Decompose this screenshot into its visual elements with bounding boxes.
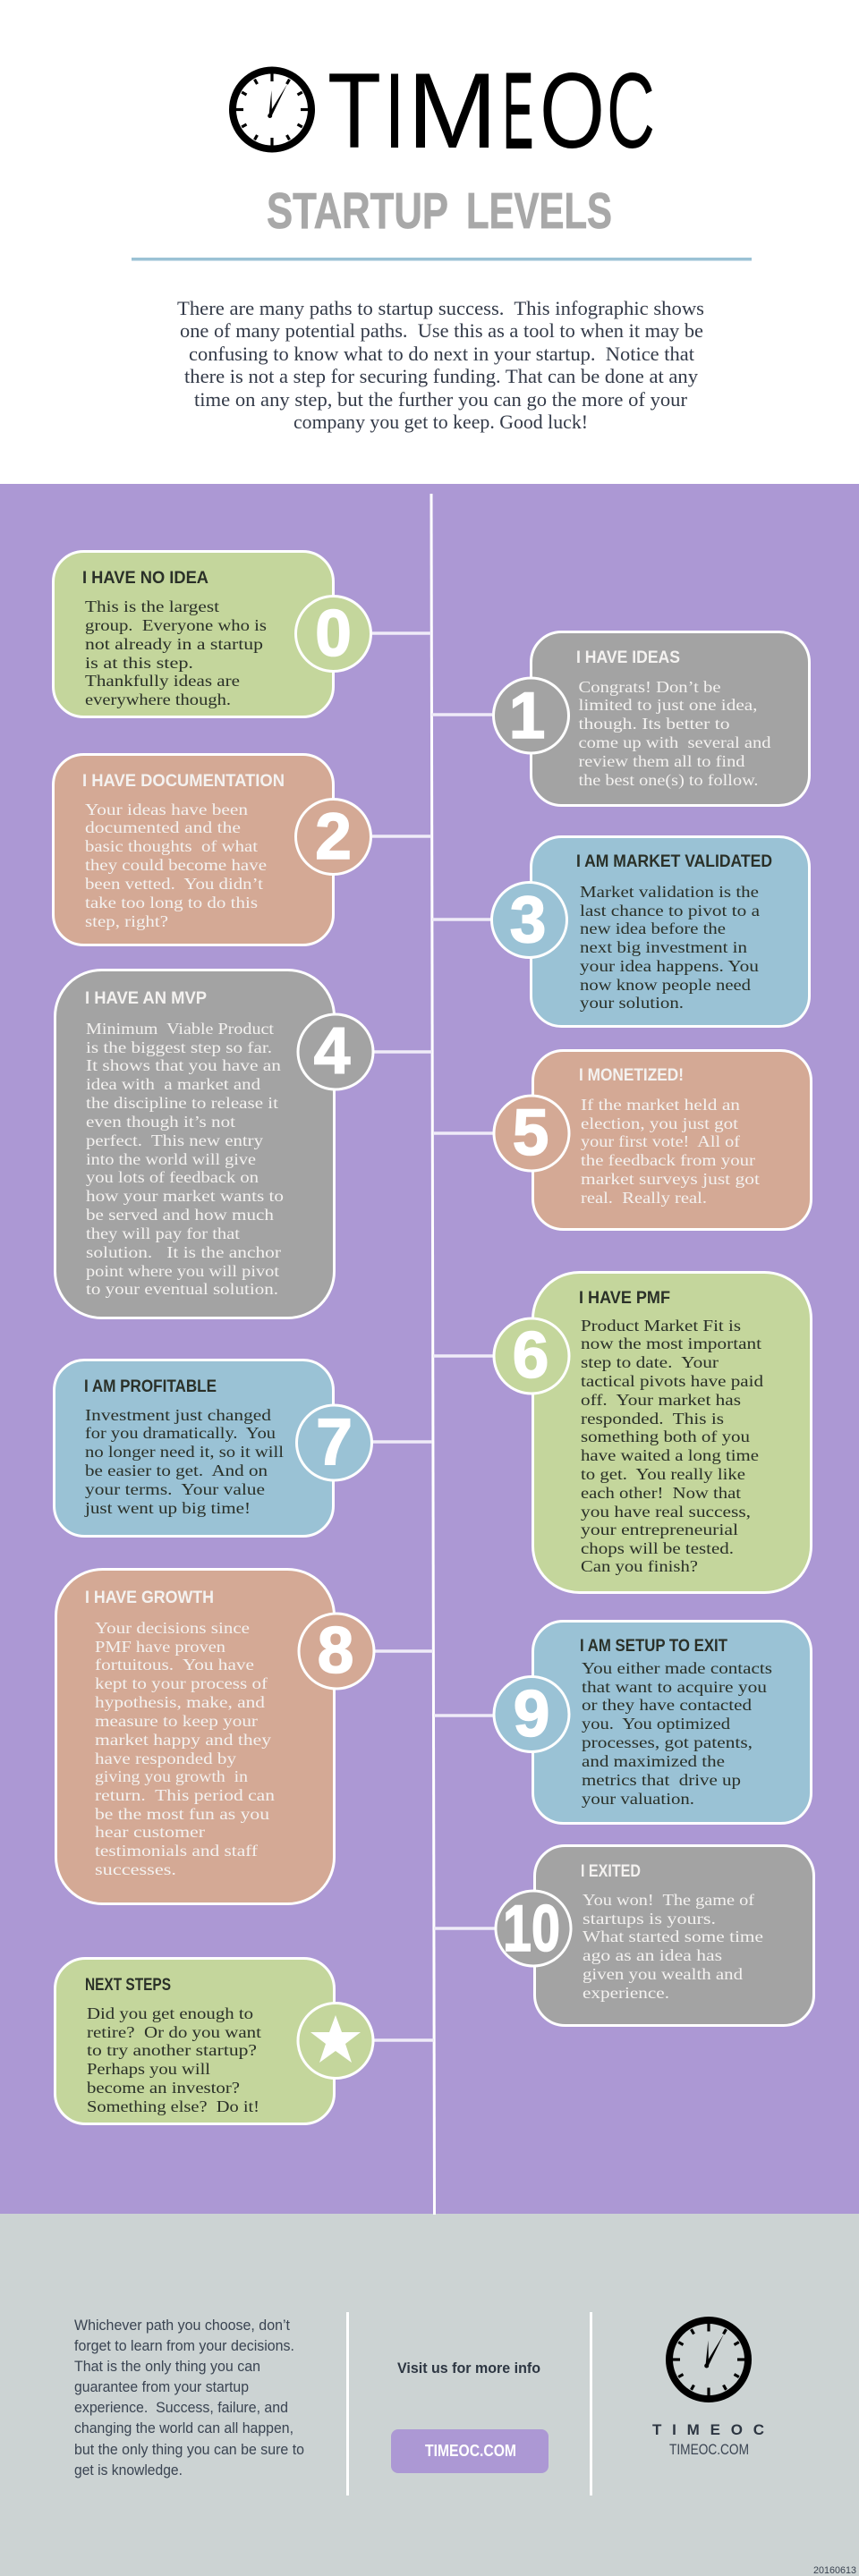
body text: market happy and they bbox=[95, 1731, 271, 1749]
body text: even though it’s not bbox=[86, 1113, 235, 1131]
intro text: There are many paths to startup success. This infographic shows bbox=[177, 297, 704, 319]
footer brand name: T I M E O C bbox=[652, 2421, 764, 2438]
body text: your terms. Your value bbox=[85, 1480, 265, 1498]
body text bbox=[581, 1317, 763, 1575]
body text bbox=[86, 1020, 284, 1298]
body text: review them all to find bbox=[578, 752, 745, 770]
card background bbox=[532, 837, 809, 1027]
number badge bbox=[298, 1014, 373, 1089]
footer website: TIMEOC.COM bbox=[669, 2441, 749, 2458]
body text: responded. This is bbox=[581, 1410, 724, 1428]
body text bbox=[85, 597, 267, 708]
body text bbox=[84, 1406, 284, 1517]
body text: chops will be tested. bbox=[581, 1539, 734, 1557]
body text bbox=[580, 883, 760, 1012]
number badge: 8 bbox=[318, 1614, 353, 1687]
body text bbox=[95, 1619, 275, 1878]
body text: your solution. bbox=[580, 994, 684, 1012]
logo wordmark bbox=[327, 51, 655, 171]
body text: Your ideas have been bbox=[85, 801, 248, 818]
connector bbox=[433, 1131, 493, 1135]
body text: new idea before the bbox=[580, 919, 726, 937]
body text: given you wealth and bbox=[583, 1965, 743, 1983]
body text: they could become have bbox=[85, 856, 267, 874]
body text: point where you will pivot bbox=[86, 1262, 279, 1280]
body text: your entrepreneurial bbox=[581, 1521, 738, 1538]
body text: take too long to do this bbox=[85, 894, 258, 911]
intro text bbox=[177, 297, 704, 433]
body text: limited to just one idea, bbox=[578, 696, 757, 714]
body text: have waited a long time bbox=[581, 1446, 759, 1464]
body text: everywhere though. bbox=[85, 691, 231, 708]
logo wordmark: O bbox=[540, 51, 605, 171]
number badge: 1 bbox=[509, 680, 545, 752]
body text: Minimum Viable Product bbox=[86, 1020, 274, 1038]
logo wordmark: I bbox=[384, 51, 405, 171]
purple timeline background bbox=[0, 484, 859, 2214]
footer divider left bbox=[346, 2312, 349, 2496]
title bbox=[267, 182, 612, 240]
heading: I HAVE GROWTH bbox=[85, 1588, 214, 1607]
body text: how your market wants to bbox=[86, 1187, 284, 1205]
body text: retire? Or do you want bbox=[87, 2023, 261, 2041]
body text: be easier to get. And on bbox=[85, 1462, 268, 1479]
icon: clock logo bbox=[233, 70, 311, 148]
body text: ago as an idea has bbox=[583, 1946, 722, 1964]
number badge bbox=[494, 1318, 569, 1394]
body text: to try another startup? bbox=[87, 2041, 257, 2059]
body text: something both of you bbox=[581, 1428, 750, 1445]
card background bbox=[532, 631, 809, 805]
number badge bbox=[494, 1676, 569, 1751]
logo wordmark: E bbox=[503, 51, 533, 171]
panel: level 10 bbox=[434, 1846, 814, 2025]
panel: level 6 bbox=[433, 1272, 811, 1592]
body text: and maximized the bbox=[582, 1752, 725, 1770]
footer text: That is the only thing you can bbox=[74, 2359, 260, 2375]
body text: be the most fun as you bbox=[95, 1805, 269, 1823]
version stamp: 20160613 bbox=[813, 2565, 856, 2576]
body text: election, you just got bbox=[581, 1114, 738, 1132]
heading: I HAVE AN MVP bbox=[85, 988, 207, 1008]
body text: Did you get enough to bbox=[87, 2004, 253, 2022]
footer text: forget to learn from your decisions. bbox=[74, 2338, 294, 2354]
heading: I HAVE NO IDEA bbox=[82, 568, 208, 588]
body text: become an investor? bbox=[87, 2079, 240, 2097]
body text: now the most important bbox=[581, 1335, 761, 1352]
heading: I HAVE DOCUMENTATION bbox=[82, 771, 285, 791]
body text: perfect. This new entry bbox=[86, 1131, 263, 1149]
card background bbox=[54, 551, 333, 717]
footer text: guarantee from your startup bbox=[74, 2379, 249, 2395]
body text: or they have contacted bbox=[582, 1696, 752, 1714]
connector bbox=[434, 1927, 495, 1930]
body text: have responded by bbox=[95, 1750, 236, 1767]
body text: now know people need bbox=[580, 976, 751, 994]
body text: What started some time bbox=[583, 1928, 763, 1945]
connector bbox=[374, 1050, 432, 1054]
body text: Investment just changed bbox=[85, 1406, 271, 1424]
body text: to get. You really like bbox=[581, 1465, 745, 1483]
body text: off. Your market has bbox=[581, 1391, 741, 1409]
body text: Can you finish? bbox=[581, 1557, 698, 1575]
footer text: Whichever path you choose, don’t bbox=[74, 2318, 290, 2334]
body text: hear customer bbox=[95, 1823, 205, 1841]
card background bbox=[55, 970, 335, 1318]
body text: last chance to pivot to a bbox=[580, 902, 760, 919]
connector bbox=[374, 1649, 433, 1653]
body text: real. Really real. bbox=[581, 1189, 707, 1207]
panel: level 7 bbox=[54, 1360, 432, 1537]
body text: group. Everyone who is bbox=[85, 616, 267, 634]
heading: I MONETIZED! bbox=[579, 1065, 684, 1085]
intro text: company you get to keep. Good luck! bbox=[293, 411, 588, 433]
heading: I AM PROFITABLE bbox=[84, 1377, 217, 1396]
number badge: 9 bbox=[514, 1678, 549, 1750]
number badge bbox=[297, 1405, 372, 1480]
body text: solution. It is the anchor bbox=[86, 1243, 281, 1261]
number badge bbox=[299, 1614, 374, 1689]
footer divider right bbox=[590, 2312, 592, 2496]
footer text bbox=[74, 2318, 304, 2479]
body text: you. You optimized bbox=[582, 1715, 730, 1733]
panel: level 3 bbox=[432, 837, 809, 1027]
body text: Something else? Do it! bbox=[87, 2097, 259, 2115]
title: LEVELS bbox=[466, 182, 612, 240]
body text: experience. bbox=[583, 1984, 669, 2002]
logo wordmark: T bbox=[327, 51, 381, 171]
body text: successes. bbox=[95, 1860, 176, 1878]
panel: level 2 bbox=[54, 755, 431, 945]
body text: metrics that drive up bbox=[582, 1771, 741, 1789]
button: website: TIMEOC.COM bbox=[425, 2442, 516, 2460]
number badge: 3 bbox=[510, 884, 546, 956]
footer text: experience. Success, failure, and bbox=[74, 2400, 288, 2416]
card background bbox=[55, 1959, 335, 2123]
heading: NEXT STEPS bbox=[85, 1975, 171, 1995]
card background bbox=[54, 755, 333, 945]
body text: no longer need it, so it will bbox=[85, 1443, 284, 1461]
body text: the feedback from your bbox=[581, 1151, 755, 1169]
heading: I EXITED bbox=[581, 1861, 641, 1881]
intro text: one of many potential paths. Use this as a tool to when it may be bbox=[180, 319, 703, 342]
number badge: 5 bbox=[513, 1097, 549, 1169]
number badge: 6 bbox=[513, 1319, 549, 1392]
card background bbox=[54, 1360, 333, 1537]
body text: your first vote! All of bbox=[581, 1132, 740, 1150]
body text: they will pay for that bbox=[86, 1224, 240, 1242]
body text: for you dramatically. You bbox=[85, 1424, 276, 1442]
body text: This is the largest bbox=[85, 597, 219, 615]
panel: level 5 bbox=[433, 1050, 811, 1229]
icon: footer clock bbox=[669, 2320, 748, 2399]
title: STARTUP bbox=[267, 182, 448, 240]
body text: not already in a startup bbox=[85, 635, 263, 653]
body text: Market validation is the bbox=[580, 883, 759, 901]
body text: It shows that you have an bbox=[86, 1056, 281, 1074]
connector bbox=[433, 1354, 493, 1358]
body text: If the market held an bbox=[581, 1096, 740, 1114]
body text bbox=[85, 801, 267, 930]
body text: return. This period can bbox=[95, 1786, 275, 1804]
body text: each other! Now that bbox=[581, 1484, 741, 1502]
body text: You won! The game of bbox=[583, 1891, 754, 1909]
body text: the best one(s) to follow. bbox=[578, 771, 759, 789]
panel: level 0 bbox=[54, 551, 431, 717]
number badge bbox=[295, 596, 370, 671]
body text: though. Its better to bbox=[578, 715, 730, 733]
intro text: there is not a step for securing funding. That can be done at any bbox=[184, 365, 699, 387]
body text bbox=[578, 678, 771, 789]
body text: just went up big time! bbox=[84, 1499, 251, 1517]
body text bbox=[583, 1891, 763, 2002]
number badge: 4 bbox=[314, 1015, 351, 1088]
footer text: changing the world can all happen, bbox=[74, 2420, 293, 2436]
number badge: 0 bbox=[315, 597, 352, 670]
body text: come up with several and bbox=[578, 733, 771, 751]
body text: into the world will give bbox=[86, 1150, 256, 1168]
header divider bbox=[132, 258, 752, 261]
connector bbox=[432, 918, 491, 921]
body text: market surveys just got bbox=[581, 1170, 760, 1188]
body text bbox=[582, 1659, 772, 1808]
footer text: get is knowledge. bbox=[74, 2462, 183, 2479]
body text: you lots of feedback on bbox=[86, 1168, 259, 1186]
body text: step to date. Your bbox=[581, 1353, 719, 1371]
body text bbox=[87, 2004, 261, 2115]
body text: you have real success, bbox=[581, 1503, 751, 1521]
body text: been vetted. You didn’t bbox=[85, 875, 263, 893]
connector bbox=[372, 835, 431, 838]
body text: the discipline to release it bbox=[86, 1094, 278, 1112]
body text: Perhaps you will bbox=[87, 2060, 210, 2078]
icon: star badge bbox=[298, 2004, 373, 2079]
number badge: 7 bbox=[316, 1406, 353, 1479]
timeline spine bbox=[431, 494, 435, 2215]
body text: idea with a market and bbox=[86, 1075, 260, 1093]
body text: startups is yours. bbox=[583, 1910, 716, 1928]
heading: I AM SETUP TO EXIT bbox=[580, 1636, 727, 1656]
body text: measure to keep your bbox=[95, 1712, 258, 1730]
body text: Your decisions since bbox=[95, 1619, 250, 1637]
card background bbox=[55, 1569, 335, 1903]
body text: hypothesis, make, and bbox=[95, 1693, 265, 1711]
body text: to your eventual solution. bbox=[86, 1280, 278, 1298]
body text: your valuation. bbox=[582, 1790, 694, 1808]
heading: I HAVE IDEAS bbox=[576, 648, 680, 667]
connector bbox=[372, 631, 431, 635]
body text: Product Market Fit is bbox=[581, 1317, 741, 1335]
intro text: time on any step, but the further you can go the more of your bbox=[194, 388, 688, 411]
body text: basic thoughts of what bbox=[85, 837, 258, 855]
number badge bbox=[494, 678, 569, 753]
panel: level 9 bbox=[434, 1621, 811, 1823]
card background bbox=[535, 1846, 814, 2025]
number badge: 2 bbox=[315, 801, 352, 873]
panel: level 8 bbox=[55, 1569, 433, 1903]
panel: level 4 bbox=[55, 970, 432, 1318]
body text: step, right? bbox=[85, 912, 168, 930]
connector bbox=[431, 713, 492, 716]
body text: fortuitous. You have bbox=[95, 1656, 254, 1674]
footer background bbox=[0, 2214, 859, 2576]
body text bbox=[581, 1096, 760, 1207]
body text: be served and how much bbox=[86, 1206, 274, 1224]
connector bbox=[434, 1714, 493, 1717]
body text: next big investment in bbox=[580, 938, 747, 956]
number badge bbox=[492, 882, 567, 957]
card background bbox=[533, 1272, 811, 1592]
body text: your idea happens. You bbox=[580, 957, 759, 975]
heading: I HAVE PMF bbox=[579, 1288, 670, 1308]
card background bbox=[533, 1050, 811, 1229]
body text: PMF have proven bbox=[95, 1638, 225, 1656]
body text: testimonials and staff bbox=[95, 1842, 258, 1860]
body text: documented and the bbox=[85, 818, 241, 836]
card background bbox=[533, 1621, 811, 1823]
body text: is the biggest step so far. bbox=[86, 1038, 272, 1056]
body text: that want to acquire you bbox=[582, 1678, 767, 1696]
number badge bbox=[494, 1096, 569, 1171]
body text: You either made contacts bbox=[582, 1659, 772, 1677]
header background bbox=[0, 0, 859, 484]
connector bbox=[372, 1440, 432, 1444]
heading: I AM MARKET VALIDATED bbox=[576, 852, 772, 871]
body text: giving you growth in bbox=[95, 1767, 248, 1785]
number badge: 10 bbox=[503, 1893, 560, 1965]
body text: kept to your process of bbox=[95, 1674, 268, 1692]
number badge bbox=[295, 800, 370, 875]
body text: processes, got patents, bbox=[582, 1733, 753, 1751]
body text: is at this step. bbox=[85, 654, 193, 672]
logo wordmark: C bbox=[607, 51, 655, 171]
footer text: but the only thing you can be sure to bbox=[74, 2442, 304, 2458]
button: website bbox=[391, 2429, 549, 2473]
visit text: Visit us for more info bbox=[397, 2360, 540, 2377]
connector bbox=[374, 2038, 434, 2042]
logo wordmark: M bbox=[407, 51, 498, 171]
body text: Thankfully ideas are bbox=[85, 672, 240, 690]
panel: next steps bbox=[55, 1959, 434, 2123]
body text: Congrats! Don’t be bbox=[578, 678, 721, 696]
panel: level 1 bbox=[431, 631, 809, 805]
body text: tactical pivots have paid bbox=[581, 1372, 763, 1390]
intro text: confusing to know what to do next in your startup. Notice that bbox=[189, 343, 695, 365]
